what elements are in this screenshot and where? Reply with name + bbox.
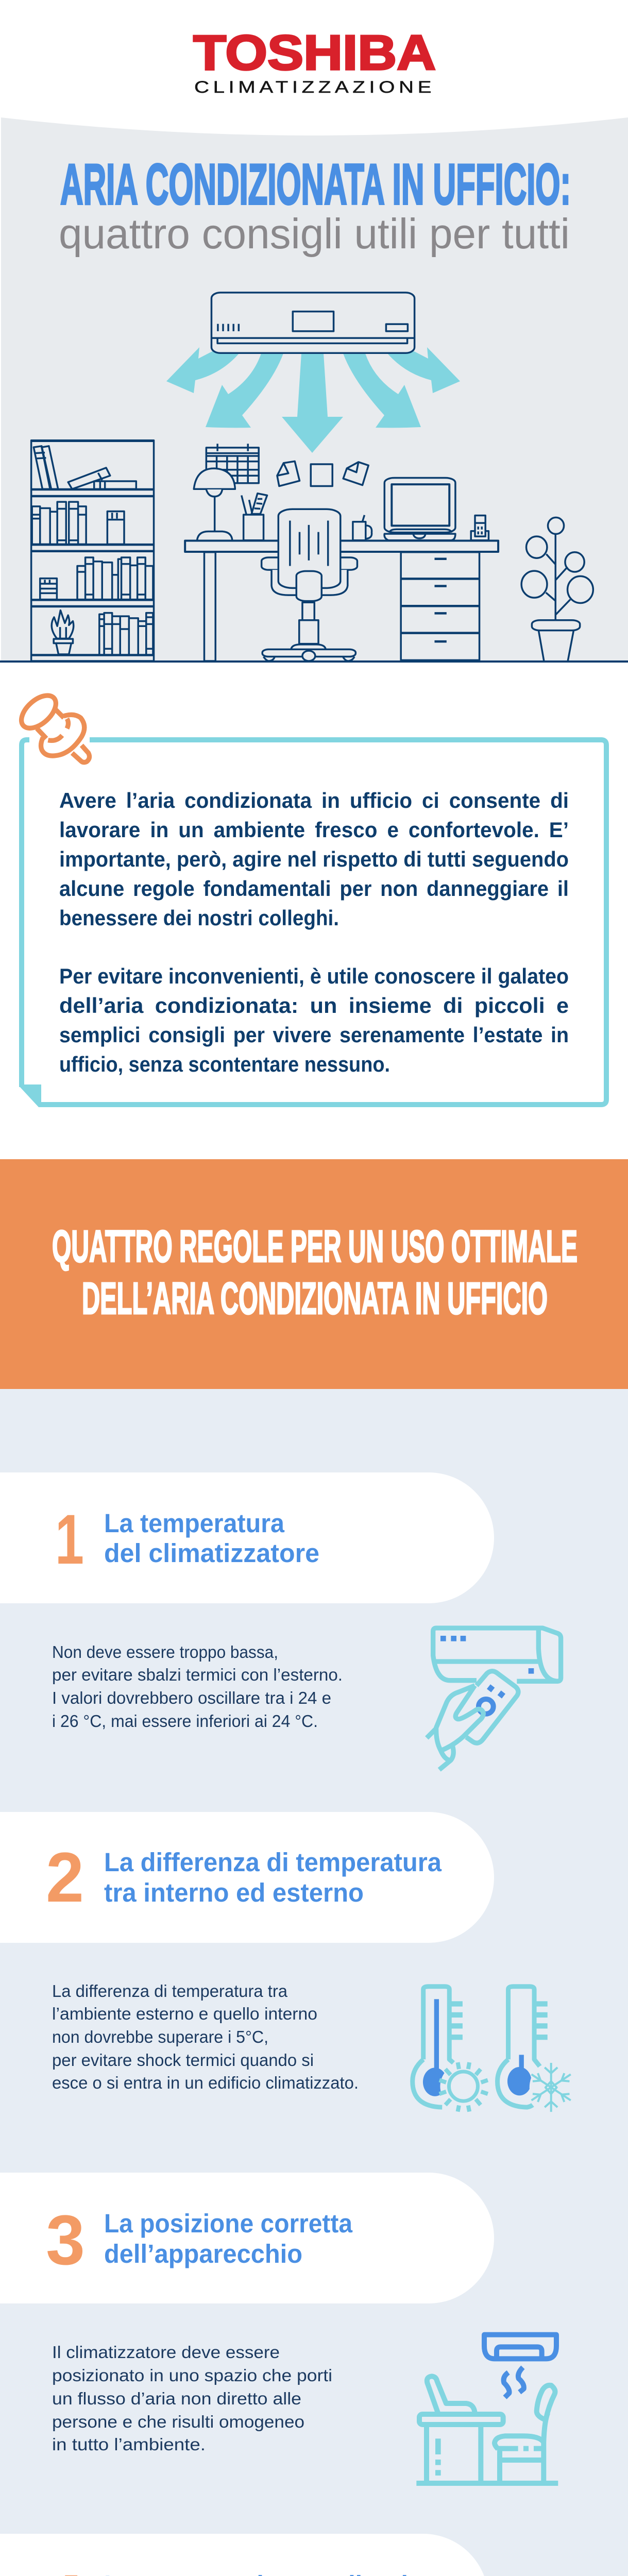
icon: wall air conditioner <box>211 293 415 353</box>
rule 1 text: I valori dovrebbero oscillare tra i 24 e <box>52 1688 331 1707</box>
floor line <box>0 660 628 663</box>
intro text: semplici consigli per vivere serenamente l’estate in <box>59 1023 569 1047</box>
rule 3 text: posizionato in uno spazio che porti <box>52 2366 332 2385</box>
intro text: ufficio, senza scontentare nessuno. <box>59 1052 390 1076</box>
intro text: Avere l’aria condizionata in ufficio ci consente di <box>59 788 569 812</box>
rule 3 header: 3 <box>46 2201 85 2280</box>
rule 2 text: per evitare shock termici quando si <box>52 2050 314 2070</box>
rule 3 header: La posizione corretta <box>104 2209 353 2238</box>
rule 3 header: dell’apparecchio <box>104 2239 302 2268</box>
panel: rules background <box>0 1389 628 2576</box>
mug <box>353 515 372 540</box>
paper sheets <box>277 461 368 486</box>
rule 1 text: i 26 °C, mai essere inferiori ai 24 °C. <box>52 1711 318 1731</box>
rule 1 text: per evitare sbalzi termici con l’esterno. <box>52 1665 343 1684</box>
rule 2 text <box>52 1981 359 2092</box>
bookcase <box>31 440 154 661</box>
arrows: cold air flow <box>166 347 460 453</box>
logo: Toshiba Climatizzazione: TOSHIBA <box>193 25 436 80</box>
intro text: dell’aria condizionata: un insieme di piccoli e <box>59 993 569 1018</box>
intro text: lavorare in un ambiente fresco e confortevole. E’ <box>59 818 569 842</box>
rule 3 header <box>0 2173 494 2303</box>
logo: Toshiba Climatizzazione: CLIMATIZZAZIONE <box>194 78 435 96</box>
rule 2 text: esce o si entra in un edificio climatizzato. <box>52 2073 359 2092</box>
rule 1 header: del climatizzatore <box>104 1538 319 1568</box>
rule 3 text: persone e che risulti omogeneo <box>52 2412 304 2431</box>
rule 1 header: La temperatura <box>104 1509 285 1538</box>
hot thermometer <box>413 1987 488 2112</box>
phone <box>471 516 488 540</box>
panel: orange banner <box>0 1159 628 1389</box>
laptop <box>384 478 455 540</box>
rule 1 header <box>0 1472 494 1603</box>
banner heading <box>52 1222 578 1324</box>
rule 1 text <box>52 1642 343 1731</box>
calendar <box>206 444 259 483</box>
rule 2 text: l’ambiente esterno e quello interno <box>52 2004 317 2023</box>
rule 3 text <box>52 2343 332 2454</box>
icon: thermometers with sun and snowflake <box>413 1987 573 2112</box>
potted plant <box>521 517 593 660</box>
rule 2 header <box>0 1812 494 1943</box>
rule 2 header: 2 <box>46 1838 84 1917</box>
icon: desk, chair and air conditioner <box>416 2335 558 2486</box>
panel: intro note <box>19 740 606 1107</box>
panel: hero background <box>1 117 628 662</box>
rule 1 header: 1 <box>55 1500 84 1579</box>
rule 3 text: un flusso d’aria non diretto alle <box>52 2389 301 2408</box>
pen cup <box>242 494 267 540</box>
rule 2 header: La differenza di temperatura <box>104 1848 442 1877</box>
note border <box>22 740 606 1105</box>
title <box>59 152 571 258</box>
icon: push pin <box>15 689 90 762</box>
folded corner <box>19 1084 41 1107</box>
intro text: alcune regole fondamentali per non danneggiare il <box>59 876 569 901</box>
desk lamp <box>194 468 235 540</box>
rule 4 header <box>0 2534 488 2576</box>
rule 3 text: Il climatizzatore deve essere <box>52 2343 280 2362</box>
illustration: office scene <box>31 440 593 661</box>
intro text <box>59 788 569 1076</box>
rule 3 text: in tutto l’ambiente. <box>52 2435 206 2454</box>
rule 1 text: Non deve essere troppo bassa, <box>52 1642 278 1662</box>
title: quattro consigli utili per tutti <box>59 210 570 258</box>
icon: remote control and air conditioner <box>427 1628 561 1770</box>
desk <box>185 541 498 661</box>
office chair <box>262 509 357 661</box>
intro text: importante, però, agire nel rispetto di tutti seguendo <box>59 847 569 871</box>
rule 2 header: tra interno ed esterno <box>104 1878 364 1907</box>
intro text: Per evitare inconvenienti, è utile conoscere il galateo <box>59 964 569 988</box>
rule 2 text: non dovrebbe superare i 5°C, <box>52 2027 268 2046</box>
rule 2 text: La differenza di temperatura tra <box>52 1981 288 2001</box>
cold thermometer <box>498 1987 573 2112</box>
intro text: benessere dei nostri colleghi. <box>59 906 339 930</box>
